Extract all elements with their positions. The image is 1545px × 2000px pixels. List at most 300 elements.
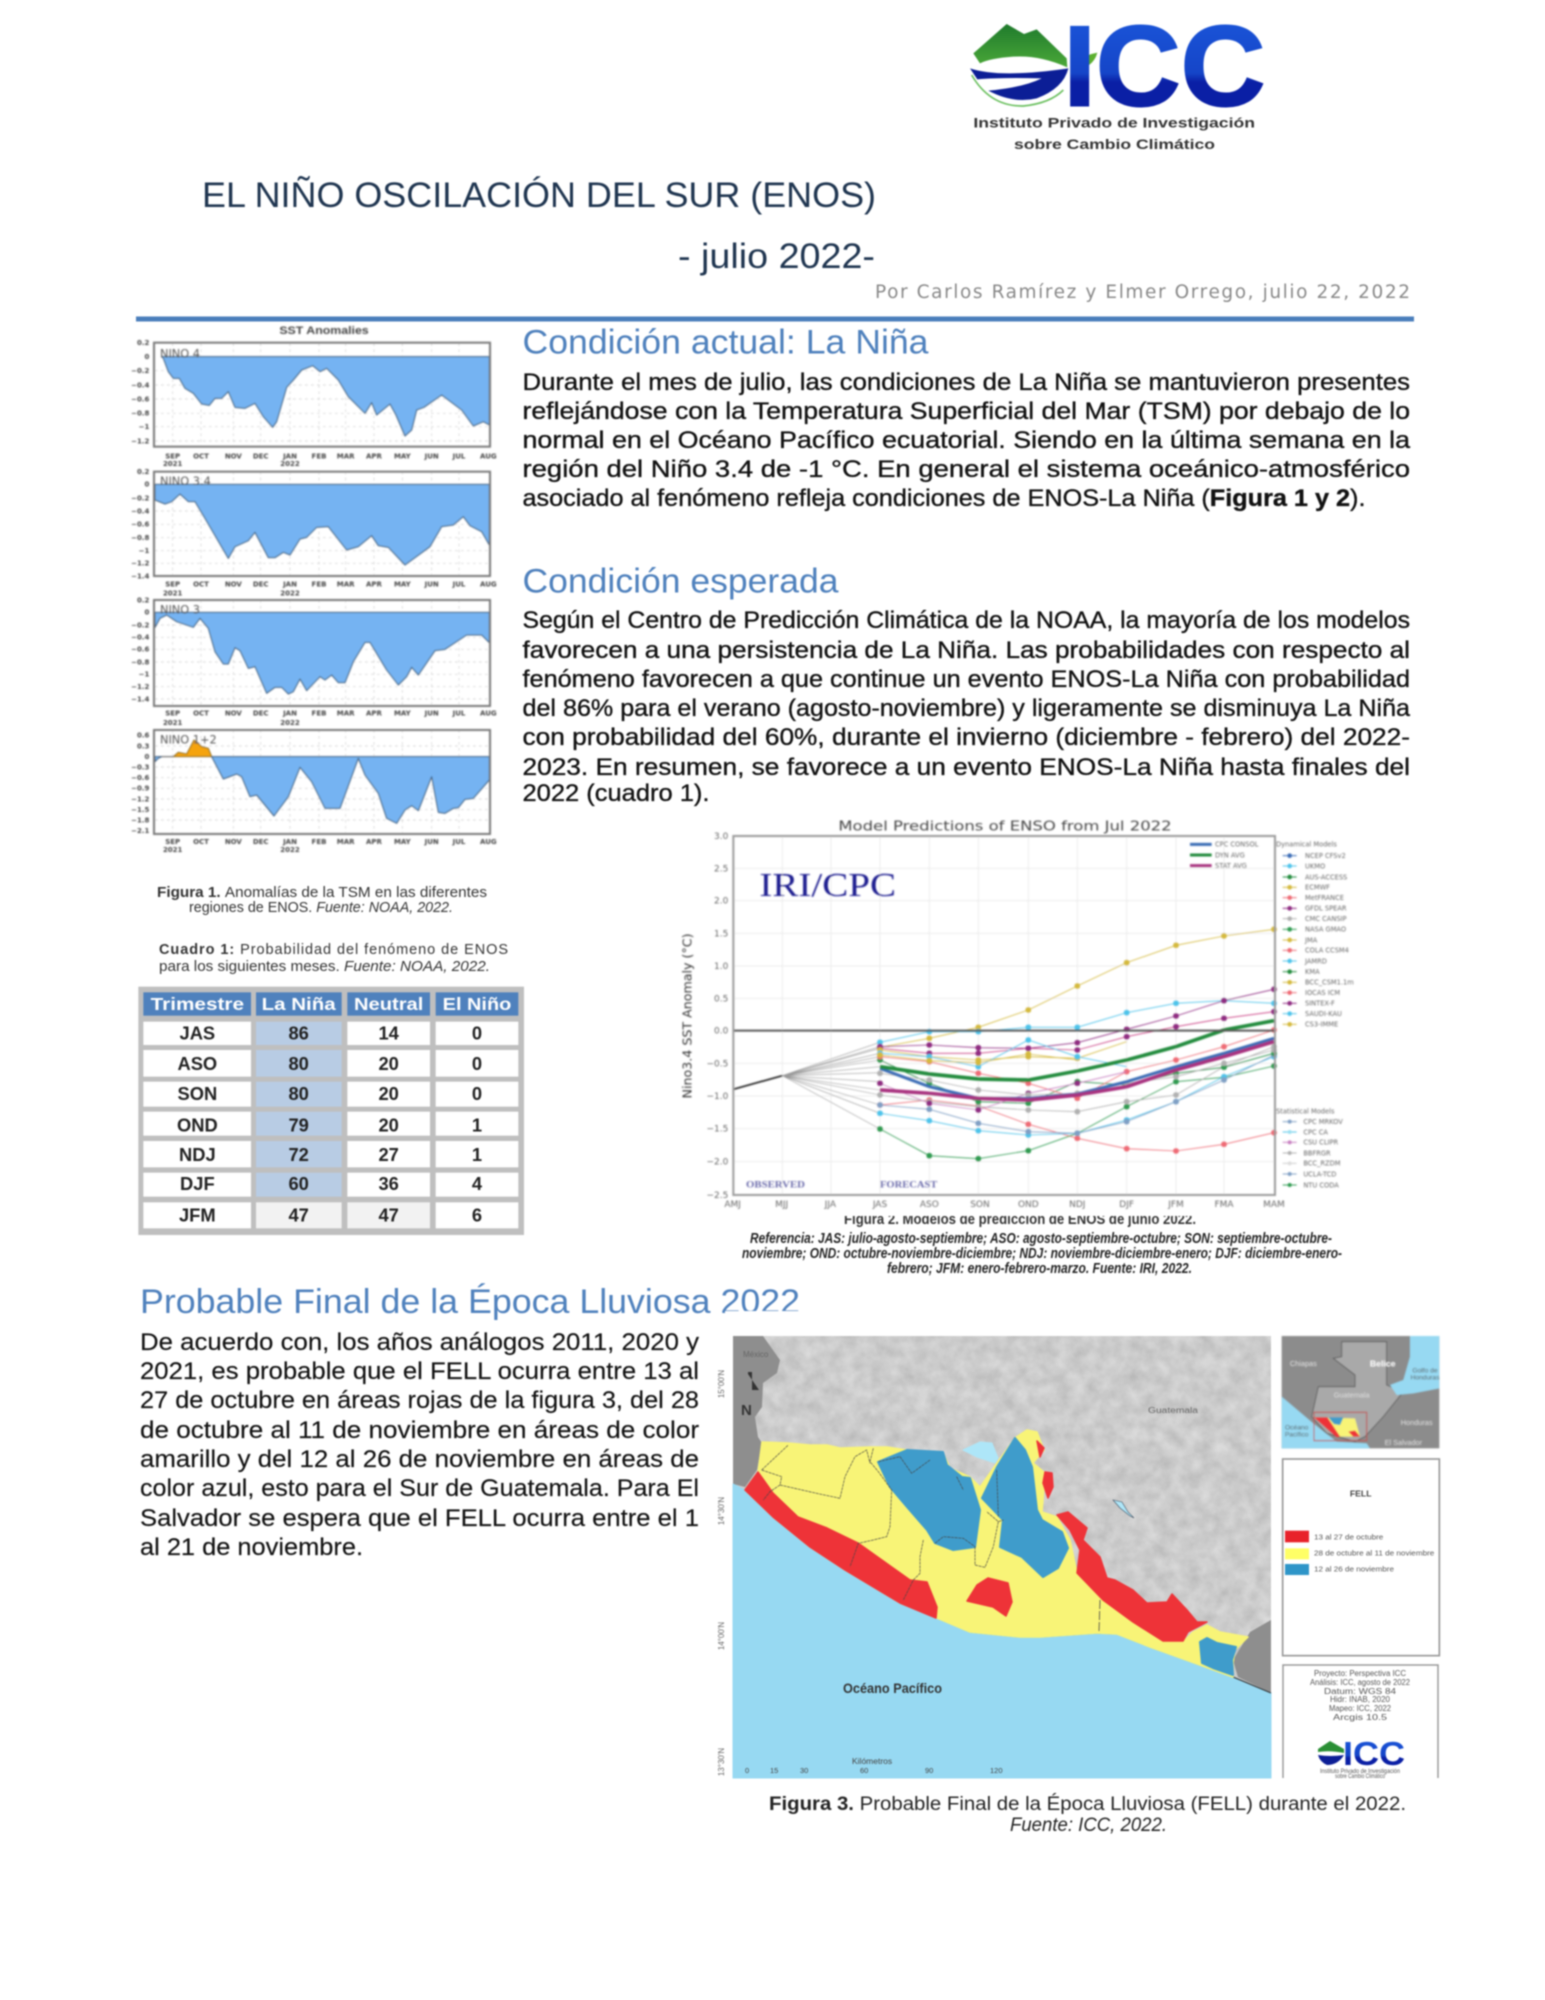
y axis labels: 2.0: [714, 897, 729, 907]
chart: NINO 4: APR: [366, 452, 383, 460]
table rows: [143, 1022, 518, 1228]
dynamical models legend: ECMWF: [1305, 884, 1330, 892]
table rows: 80: [288, 1083, 309, 1104]
chart: NINO 3.4: JUN: [424, 580, 439, 588]
chart: NINO 3: MAY: [394, 710, 412, 718]
dynamical models legend: GFDL SPEAR: [1305, 905, 1347, 913]
text block: condición esperada: fenómeno favorecen a que continue un evento ENOS-La Niña con probabilidad: [522, 666, 1410, 693]
text block: FELL: 27 de octubre en áreas rojas de la figura 3, del 28: [140, 1387, 699, 1414]
y axis labels: −1.0: [707, 1092, 729, 1102]
chart: NINO 3.4: −0.4: [131, 507, 149, 515]
chart: NINO 3: −1: [139, 671, 149, 679]
chart: NINO 3: 0.2: [137, 596, 149, 604]
chart: NINO 3.4: −1: [139, 547, 149, 555]
statistical models legend: CSU CLIPR: [1303, 1139, 1339, 1147]
chart: NINO 1+2: FEB: [312, 838, 326, 846]
table rows: NDJ: [179, 1144, 216, 1165]
chart: NINO 4: 0: [144, 353, 149, 361]
x axis labels: JJA: [824, 1200, 837, 1210]
chart: NINO 4: JUN: [424, 452, 439, 460]
chart: NINO 3.4: NINO 3.4: [160, 474, 211, 488]
map labels: 14°30'N: [717, 1497, 726, 1525]
subtitle date: - julio 2022-: [678, 237, 875, 276]
map scale: 90: [925, 1766, 933, 1775]
chart: NINO 1+2: DEC: [253, 838, 269, 846]
map borders: [762, 1445, 1003, 1600]
chart: NINO 3: JAN: [282, 710, 297, 718]
text block: condición actual: [522, 369, 1411, 512]
table rows: 14: [378, 1022, 400, 1043]
chart: NINO 1+2: [131, 730, 497, 854]
icon: north arrow: [741, 1372, 759, 1419]
inset labels: Belice: [1370, 1359, 1396, 1369]
chart: NINO 4: −0.8: [131, 410, 149, 418]
text block: condición esperada: favorecen a una persistencia de La Niña. Las probabilidades con respecto al: [522, 637, 1410, 664]
inset labels: Guatemala: [1334, 1390, 1371, 1399]
chart: NINO 4: −0.6: [131, 395, 149, 403]
chart: NINO 3: −0.2: [131, 621, 149, 629]
chart: NINO 4: JUL: [452, 452, 466, 460]
text block: condición actual: región del Niño 3.4 de -1 °C. En general el sistema oceánico-atmosférico: [522, 456, 1410, 483]
chart: NINO 3: JUN: [424, 710, 439, 718]
observed and forecast labels: [746, 1180, 937, 1190]
chart: NINO 3: FEB: [312, 710, 326, 718]
chart: NINO 1+2: SEP: [165, 838, 180, 846]
chart: NINO 3.4: −0.2: [131, 495, 149, 503]
chart: NINO 4: −0.2: [131, 367, 149, 375]
table rows: 1: [472, 1115, 482, 1136]
map ocean: [733, 1484, 1271, 1778]
map labels: 13°30'N: [717, 1748, 726, 1776]
x axis labels: JAS: [872, 1200, 887, 1210]
inset labels: Pacífico: [1285, 1432, 1309, 1439]
dynamical models legend: UKMO: [1305, 862, 1325, 870]
dynamical models legend: BCC_CSM1.1m: [1305, 979, 1354, 987]
table rows: JAS: [180, 1022, 215, 1043]
heading: Condición esperada: Condición esperada: [522, 562, 839, 600]
chart: NINO 4: 0.2: [137, 339, 149, 347]
text block: FELL: amarillo y del 12 al 26 de noviembre en áreas de: [140, 1446, 699, 1473]
text block: FELL: Salvador se espera que el FELL ocurra entre el 1: [140, 1505, 699, 1532]
x axis labels: [724, 1200, 1285, 1210]
dynamical models legend: MetFRANCE: [1305, 894, 1344, 902]
chart: NINO 3.4: OCT: [193, 580, 209, 588]
chart: model predictions of ENSO: [680, 820, 1354, 1210]
table rows: ASO: [177, 1053, 217, 1074]
chart: NINO 3: [131, 596, 497, 727]
chart: NINO 3.4: MAY: [394, 580, 412, 588]
chart: NINO 4: NOV: [225, 452, 242, 460]
chart: NINO 3: −0.4: [131, 634, 149, 642]
info box: map credits: Hidr: INAB, 2020: [1330, 1695, 1391, 1704]
y axis labels: −0.5: [707, 1059, 728, 1069]
map labels: [717, 1350, 1199, 1776]
text block: FELL: color azul, esto para el Sur de Guatemala. Para El: [140, 1475, 699, 1502]
x axis labels: FMA: [1214, 1200, 1234, 1210]
text block: FELL: [140, 1329, 699, 1561]
chart: NINO 3: NINO 3: [160, 602, 200, 616]
byline: Por Carlos Ramírez y Elmer Orrego, julio 22, 2022: [875, 282, 1410, 303]
header rule: [136, 316, 1414, 322]
chart: NINO 3.4: FEB: [312, 580, 326, 588]
dynamical models legend: NCEP CFSv2: [1305, 852, 1346, 860]
icon: north arrow: N: [741, 1402, 752, 1419]
table rows: 72: [288, 1144, 309, 1165]
map lake: [963, 1442, 998, 1463]
text block: condición esperada: 2022 (cuadro 1).: [522, 780, 710, 807]
chart: NINO 1+2: 0: [144, 753, 149, 761]
chart: NINO 1+2: −0.3: [131, 763, 149, 771]
title: EL NIÑO OSCILACIÓN DEL SUR (ENOS): [202, 176, 876, 215]
map scale: 15: [770, 1766, 778, 1775]
info box: map credits: [1283, 1665, 1438, 1780]
legend: blue: [1285, 1564, 1394, 1575]
mini logo: sobre Cambio Climático: [1335, 1773, 1385, 1780]
info box: map credits: Arcgis 10.5: [1333, 1713, 1388, 1722]
info box: map credits: Datum: WGS 84: [1324, 1687, 1397, 1696]
statistical models legend: NTU CODA: [1303, 1181, 1339, 1189]
chart: NINO 1+2: OCT: [193, 838, 209, 846]
observed and fan lines: [733, 1042, 880, 1129]
averages legend: STAT AVG: [1215, 862, 1247, 870]
table rows: 79: [288, 1115, 309, 1136]
chart: NINO 3: −0.6: [131, 646, 149, 654]
inset map: location: [1282, 1336, 1440, 1448]
dynamical models legend: Dynamical Models: [1276, 841, 1337, 849]
table rows: 36: [378, 1173, 399, 1194]
table header: Trimestre: [151, 994, 244, 1014]
statistical models legend: Statistical Models: [1276, 1107, 1335, 1115]
y axis labels: [707, 832, 729, 1201]
chart: NINO 3.4: −0.8: [131, 534, 149, 542]
chart: NINO 4: MAY: [394, 452, 412, 460]
chart: NINO 1+2: 0.6: [137, 731, 149, 739]
inset labels: [1285, 1359, 1440, 1447]
table rows: SON: [177, 1083, 217, 1104]
chart: NINO 1+2: −1.5: [131, 806, 149, 814]
chart: NINO 1+2: 0.3: [137, 742, 149, 750]
chart: NINO 1+2: AUG: [480, 838, 497, 846]
table rows: 0: [472, 1083, 482, 1104]
chart: NINO 1+2: −1.8: [131, 816, 149, 824]
statistical models legend: [1276, 1107, 1343, 1189]
caption: figura 1: regiones de ENOS. Fuente: NOAA, 2022.: [189, 900, 453, 916]
chart: NINO 3: −1.4: [131, 695, 149, 703]
statistical models legend: BCC_RZDM: [1303, 1160, 1341, 1168]
y axis labels: 2.5: [714, 864, 728, 874]
y axis labels: −2.5: [707, 1191, 728, 1201]
caption: figura 2: noviembre; OND: octubre-noviembre-diciembre; NDJ: noviembre-diciembre-enero; DJF: diciembre-enero-: [742, 1246, 1342, 1262]
caption: figura 3: Fuente: ICC, 2022.: [1010, 1815, 1167, 1836]
heading: probable final: Probable Final de la Época Lluviosa 2022: [140, 1283, 800, 1321]
chart: NINO 1+2: JUN: [424, 838, 439, 846]
chart: NINO 3.4: AUG: [480, 580, 497, 588]
map labels: Guatemala: [1148, 1406, 1199, 1415]
dynamical models legend: JMA: [1304, 936, 1318, 944]
chart: NINO 4: MAR: [337, 452, 355, 460]
logo caption: [973, 114, 1255, 152]
dynamical models legend: AUS-ACCESS: [1305, 873, 1347, 881]
x axis labels: NDJ: [1069, 1200, 1085, 1210]
chart: NINO 4: NINO 4: [160, 346, 200, 360]
chart: NINO 3: NOV: [225, 710, 242, 718]
table rows: 47: [378, 1204, 399, 1225]
logo caption: Instituto Privado de Investigación: [973, 114, 1255, 130]
chart: NINO 4: −0.4: [131, 381, 149, 389]
statistical models legend: CPC CA: [1303, 1128, 1328, 1136]
chart: NINO 3.4: NOV: [225, 580, 242, 588]
chart: NINO 1+2: −0.6: [131, 774, 149, 782]
chart: NINO 1+2: APR: [366, 838, 383, 846]
y axis labels: 1.5: [714, 929, 728, 939]
map area: yellow: [745, 1430, 1248, 1677]
dynamical models legend: CS3-IMME: [1305, 1021, 1338, 1029]
text block: condición esperada: 2023. En resumen, se favorece a un evento ENOS-La Niña hasta finales del: [522, 754, 1410, 781]
chart: NINO 3.4: SEP: [165, 580, 180, 588]
chart: NINO 3: JUL: [452, 710, 466, 718]
map scale: 60: [860, 1766, 868, 1775]
icon: water: [970, 68, 1068, 100]
map area: blue: [878, 1438, 1236, 1675]
caption: figura 2: febrero; JFM: enero-febrero-marzo. Fuente: IRI, 2022.: [887, 1261, 1192, 1277]
dynamical models legend: COLA CCSM4: [1305, 947, 1349, 955]
IRI/CPC label: IRI/CPC: [759, 866, 896, 904]
legend box: FELL: [1283, 1459, 1439, 1656]
text block: condición esperada: Según el Centro de Predicción Climática de la NOAA, la mayoría de los modelos: [522, 607, 1410, 634]
inset labels: Honduras: [1411, 1374, 1440, 1381]
chart: NINO 1+2: −1.2: [131, 795, 149, 803]
chart: NINO 4: [131, 339, 497, 468]
table rows: 1: [472, 1144, 482, 1165]
map area: red: [745, 1441, 1207, 1641]
chart: NINO 3: SEP: [165, 710, 180, 718]
chart: NINO 3.4: 0: [144, 481, 149, 489]
chart: NINO 4: 2021: [163, 460, 183, 468]
table rows: 80: [288, 1053, 309, 1074]
table rows: 27: [378, 1144, 399, 1165]
ICC wordmark: ICC: [1063, 3, 1265, 130]
table rows: 86: [288, 1022, 309, 1043]
legend: yellow: [1285, 1548, 1434, 1559]
y axis labels: −1.5: [707, 1125, 728, 1135]
info box: map credits: Mapeo: ICC, 2022: [1329, 1704, 1392, 1713]
chart: NINO 4: OCT: [193, 452, 209, 460]
legend: red: 13 al 27 de octubre: [1314, 1533, 1383, 1542]
chart: NINO 1+2: NINO 1+2: [160, 732, 217, 746]
chart: NINO 4: DEC: [253, 452, 269, 460]
chart: NINO 3: OCT: [193, 710, 209, 718]
dynamical models legend: IOCAS ICM: [1305, 989, 1340, 997]
caption: figura 2: [742, 1196, 1342, 1277]
chart: NINO 3.4: 2021: [163, 589, 183, 597]
legend: red: [1285, 1531, 1383, 1542]
table header: [143, 992, 518, 1016]
map labels: México: [743, 1350, 769, 1359]
chart: NINO 3.4: MAR: [337, 580, 355, 588]
table rows: DJF: [180, 1173, 215, 1194]
statistical models legend: CPC MRKOV: [1303, 1118, 1343, 1126]
table rows: 0: [472, 1053, 482, 1074]
map neighbouring countries: [733, 1336, 780, 1487]
chart: NINO 1+2: MAY: [394, 838, 412, 846]
icon: leaf: [1073, 53, 1097, 71]
mini logo: ICC: [1343, 1735, 1405, 1772]
y axis title: Nino3.4 SST Anomaly (°C): [680, 933, 694, 1098]
chart: NINO 1+2: NOV: [225, 838, 242, 846]
chart title: SST Anomalies: [279, 325, 369, 337]
icon: mountains: [973, 24, 1067, 67]
chart: NINO 3: MAR: [337, 710, 355, 718]
table header: La Niña: [262, 994, 337, 1014]
logo caption: sobre Cambio Climático: [1014, 136, 1215, 152]
legend: blue: 12 al 26 de noviembre: [1314, 1565, 1394, 1574]
caption: figura 2: Referencia: JAS: julio-agosto-septiembre; ASO: agosto-septiembre-octubre; SON: septiembre-octubre-: [750, 1231, 1332, 1247]
statistical models legend: BBFRGR: [1303, 1149, 1331, 1157]
x axis labels: JFM: [1167, 1200, 1184, 1210]
chart: NINO 3.4: DEC: [253, 580, 269, 588]
text block: condición esperada: [522, 607, 1411, 807]
text block: FELL: 2021, es probable que el FELL ocurra entre 13 al: [140, 1358, 699, 1385]
chart: NINO 1+2: 2022: [280, 846, 300, 854]
chart: NINO 4: −1.2: [131, 437, 149, 445]
caption: figura 1: [157, 885, 487, 916]
heading: Condición actual: Condición actual: La Niña: [522, 324, 929, 362]
table rows: 4: [472, 1173, 483, 1194]
text block: condición actual: Durante el mes de julio, las condiciones de La Niña se mantuvieron presentes: [522, 369, 1410, 396]
inset labels: Golfo de: [1412, 1368, 1438, 1375]
chart: NINO 1+2: JUL: [452, 838, 466, 846]
dynamical models legend: JAMRD: [1304, 957, 1327, 965]
dynamical models legend: NASA GMAO: [1305, 926, 1346, 934]
panel: SST anomalies charts: [131, 325, 497, 854]
table rows: JFM: [179, 1204, 216, 1225]
chart: NINO 3: DEC: [253, 710, 269, 718]
text block: condición actual: normal en el Océano Pacífico ecuatorial. Siendo en la última semana en la: [522, 427, 1411, 454]
inset ocean: [1282, 1397, 1370, 1448]
chart: NINO 3.4: −1.4: [131, 572, 149, 580]
text block: FELL: al 21 de noviembre.: [140, 1534, 363, 1561]
chart: NINO 4: FEB: [312, 452, 326, 460]
map land relief: [733, 1336, 1271, 1778]
table rows: OND: [177, 1115, 218, 1136]
table rows: 20: [378, 1115, 399, 1136]
y axis labels: 3.0: [714, 832, 729, 842]
chart: NINO 1+2: −0.9: [131, 785, 149, 793]
text block: FELL: De acuerdo con, los años análogos 2011, 2020 y: [140, 1329, 699, 1356]
chart: NINO 3.4: APR: [366, 580, 383, 588]
averages legend: [1190, 841, 1259, 870]
chart: NINO 3.4: 2022: [280, 589, 300, 597]
table rows: 0: [472, 1022, 482, 1043]
inset Guatemala: [1312, 1342, 1403, 1442]
averages legend: DYN AVG: [1215, 851, 1245, 859]
mini logo: Instituto Privado de Investigación: [1320, 1768, 1400, 1775]
caption: cuadro 1: Cuadro 1: Probabilidad del fenómeno de ENOS: [159, 942, 508, 958]
x axis labels: OND: [1018, 1200, 1039, 1210]
statistical models legend: UCLA-TCD: [1303, 1170, 1336, 1178]
dynamical models legend: SINTEX-F: [1305, 1000, 1335, 1008]
dynamical models legend: CMC CANSIP: [1305, 915, 1347, 923]
info box: map credits: Análisis: ICC, agosto de 2022: [1310, 1678, 1411, 1687]
table: probabilidad ENOS: [138, 987, 524, 1235]
map scale: 30: [800, 1766, 808, 1775]
legend box: FELL: FELL: [1350, 1489, 1372, 1499]
logo: ICC: [970, 3, 1265, 152]
table rows: 20: [378, 1083, 399, 1104]
chart: NINO 3: 0: [144, 609, 149, 617]
inset labels: El Salvador: [1385, 1438, 1423, 1447]
x axis labels: AMJ: [724, 1200, 741, 1210]
chart: NINO 3.4: −0.6: [131, 521, 149, 529]
chart: NINO 3.4: JAN: [282, 580, 297, 588]
text block: condición esperada: del 86% para el verano (agosto-noviembre) y ligeramente se disminuya La Niña: [522, 695, 1411, 722]
chart: NINO 4: JAN: [282, 452, 297, 460]
dynamical models legend: SAUDI-KAU: [1305, 1010, 1342, 1018]
caption: figura 3: Figura 3. Probable Final de la Época Lluviosa (FELL) durante el 2022.: [769, 1794, 1406, 1815]
chart: NINO 3: −1.2: [131, 683, 149, 691]
averages legend: CPC CONSOL: [1215, 841, 1259, 849]
map label: ocean: Océano Pacífico: [843, 1680, 942, 1696]
table rows: 20: [378, 1053, 399, 1074]
caption: figura 1: Figura 1. Anomalías de la TSM en las diferentes: [157, 885, 487, 901]
chart: NINO 4: SEP: [165, 452, 180, 460]
table rows: 47: [288, 1204, 309, 1225]
map scale: 0: [745, 1766, 749, 1775]
chart: NINO 3.4: −1.2: [131, 560, 149, 568]
table rows: 60: [288, 1173, 309, 1194]
text block: FELL: de octubre al 11 de noviembre en áreas de color: [140, 1417, 699, 1444]
chart: NINO 1+2: MAR: [337, 838, 355, 846]
caption: cuadro 1: [159, 942, 508, 975]
chart: NINO 1+2: −2.1: [131, 827, 149, 835]
map scale: [745, 1766, 1003, 1775]
dynamical models legend: KMA: [1305, 968, 1320, 976]
chart: NINO 3.4: JUL: [452, 580, 466, 588]
dynamical models legend: [1276, 841, 1354, 1029]
chart: NINO 4: AUG: [480, 452, 497, 460]
chart: NINO 3: APR: [366, 710, 383, 718]
table rows: 6: [472, 1204, 482, 1225]
inset labels: Honduras: [1401, 1418, 1433, 1427]
dynamical and statistical model lines: [880, 929, 1274, 1159]
x axis labels: MJJ: [775, 1200, 788, 1210]
table header: Neutral: [354, 994, 423, 1014]
chart: NINO 1+2: JAN: [282, 838, 297, 846]
text block: condición esperada: con probabilidad del 60%, durante el invierno (diciembre - febrero) del 2022-: [522, 724, 1410, 751]
text block: condición actual: asociado al fenómeno refleja condiciones de ENOS-La Niña ( Figura 1 y 2 ).: [522, 485, 1366, 512]
info box: map credits: Proyecto: Perspectiva ICC: [1314, 1669, 1406, 1678]
y axis labels: 0.0: [714, 1027, 729, 1037]
chart: NINO 4: 2022: [280, 460, 300, 468]
chart: NINO 3.4: [131, 468, 497, 597]
observed and forecast labels: OBSERVED: [746, 1180, 806, 1190]
chart: NINO 3: 2022: [280, 719, 300, 727]
mini logo: [1318, 1735, 1405, 1780]
chart: NINO 4: −1: [139, 423, 149, 431]
map scale: 120: [990, 1766, 1003, 1775]
y axis labels: −2.0: [707, 1158, 729, 1168]
caption: figura 3: [769, 1794, 1406, 1836]
y axis labels: 1.0: [714, 962, 729, 972]
x axis labels: ASO: [920, 1200, 939, 1210]
caption: figura 2: Figura 2. Modelos de predicción de ENOS de junio 2022.: [844, 1212, 1196, 1228]
chart: NINO 1+2: 2021: [163, 846, 183, 854]
observed and forecast labels: FORECAST: [880, 1180, 937, 1190]
inset labels: Chiapas: [1290, 1359, 1317, 1368]
table header: El Niño: [443, 994, 511, 1014]
inset FELL band: [1314, 1417, 1360, 1437]
map labels: Kilómetros: [852, 1756, 892, 1766]
